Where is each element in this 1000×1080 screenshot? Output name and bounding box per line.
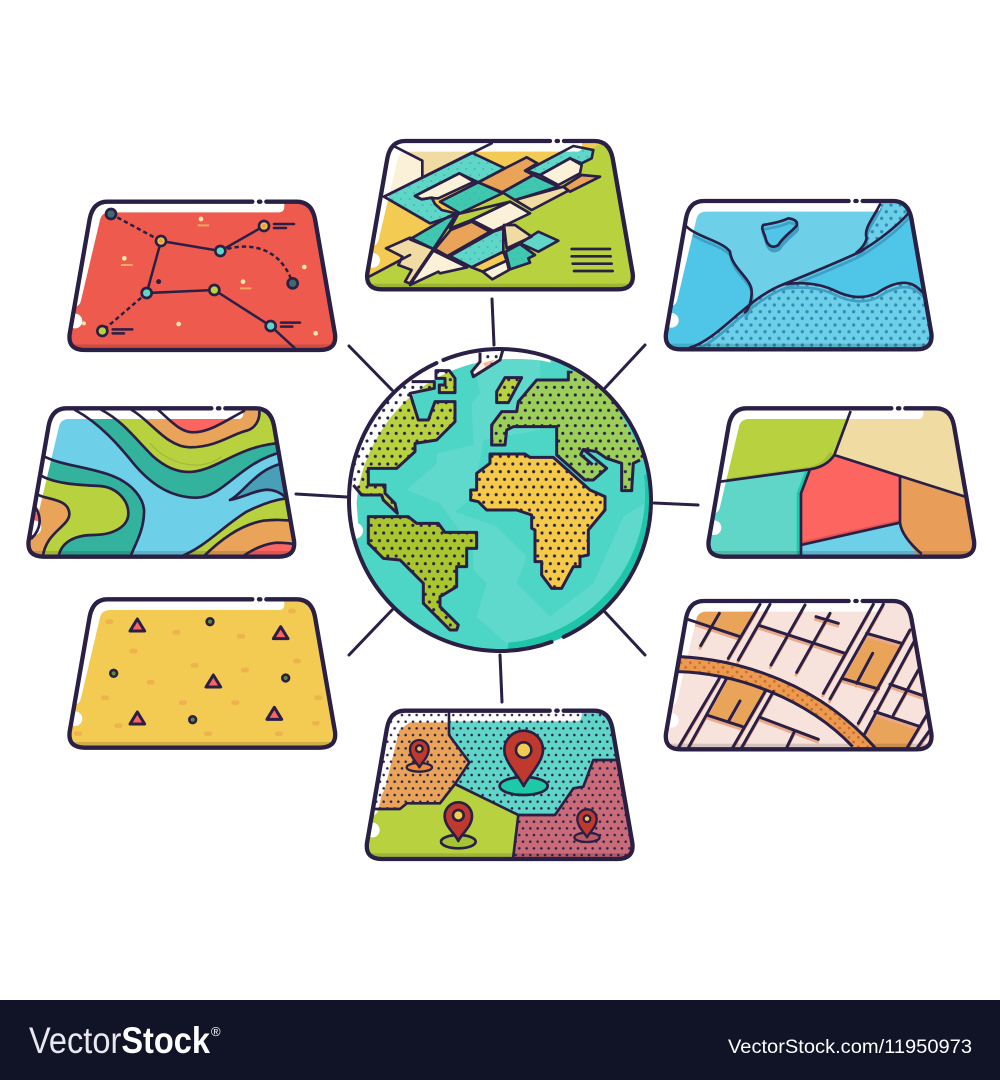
panel: terrain points map bbox=[62, 596, 342, 753]
network nodes bbox=[97, 209, 298, 336]
panel: topographic contour map bbox=[26, 406, 296, 559]
round markers bbox=[110, 618, 289, 723]
panel: location pins map bbox=[359, 705, 640, 868]
pin: pink bbox=[574, 809, 600, 842]
continent dots bbox=[353, 351, 645, 630]
footer logo: VectorStock bbox=[29, 1020, 210, 1061]
panel: coastline map bbox=[664, 198, 934, 352]
connector lines bbox=[296, 299, 698, 702]
dot texture bbox=[376, 714, 630, 856]
pin: large teal bbox=[500, 731, 548, 795]
panel: street map bbox=[664, 598, 934, 752]
globe outline bbox=[303, 303, 697, 697]
panel: constellation network map bbox=[62, 198, 342, 355]
pin: orange bbox=[407, 740, 432, 772]
ocean bbox=[356, 359, 649, 649]
footer bar bbox=[0, 1000, 1000, 1080]
footer url: VectorStock.com/11950973 bbox=[728, 1036, 972, 1058]
panel: mosaic parcels map bbox=[364, 138, 636, 292]
road band bbox=[678, 657, 877, 752]
sand specks bbox=[74, 609, 322, 736]
small markers bbox=[82, 217, 318, 336]
triangle markers bbox=[130, 619, 288, 724]
continent outlines bbox=[353, 351, 640, 630]
region borders bbox=[375, 712, 623, 862]
continent fills bbox=[347, 351, 645, 630]
panel: political regions map bbox=[700, 400, 987, 560]
globe bbox=[347, 347, 653, 653]
network lines bbox=[102, 214, 300, 348]
footer registered mark: ® bbox=[211, 1024, 221, 1039]
rim highlight bbox=[351, 351, 551, 539]
pin: green bbox=[441, 802, 476, 848]
